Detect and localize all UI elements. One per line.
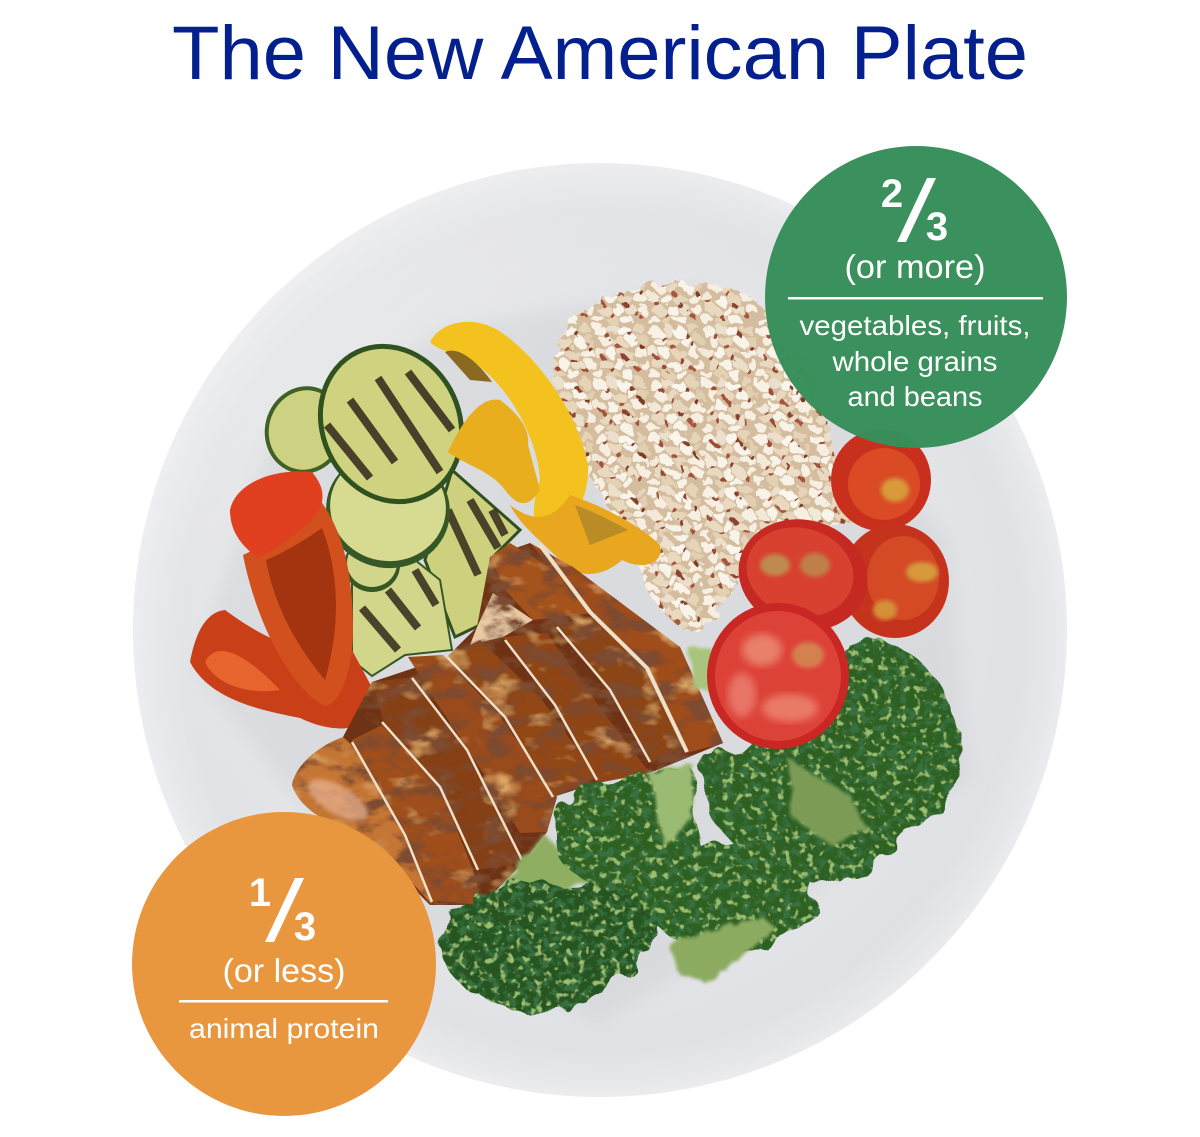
chicken: slice A (292, 737, 432, 905)
pepper: shading (205, 651, 280, 691)
grilled chicken (292, 543, 723, 905)
zucchini: left slice (255, 377, 355, 483)
quinoa (551, 279, 852, 632)
zucchini: small slice (344, 538, 400, 592)
fraction: 2/3 (881, 172, 948, 249)
label: animal protein: animal protein (189, 1013, 379, 1044)
pepper: chunk (448, 399, 540, 503)
label: food groups: vegetables, fruits, (800, 310, 1030, 341)
label: food groups: and beans (848, 381, 982, 412)
tomatoes (726, 429, 949, 645)
tomato: front (707, 603, 849, 749)
zucchini slices (255, 320, 520, 676)
fraction: 2/3: 3 (926, 205, 948, 249)
food shadow (195, 285, 970, 1025)
chicken: slice C (372, 677, 523, 870)
fraction: 1/3: 3 (294, 905, 316, 949)
title: The New American Plate (172, 11, 1028, 96)
yellow pepper (430, 322, 661, 574)
chicken: slice F (503, 633, 650, 783)
badge: two-thirds or more (765, 146, 1067, 448)
chicken: top slice (490, 543, 593, 620)
pepper: curved strip (430, 322, 588, 538)
zucchini: middle slice (317, 442, 459, 578)
label: or more: (or more) (844, 248, 986, 285)
chicken: right slice (530, 543, 723, 753)
tomato: middle (726, 505, 880, 645)
plate (133, 163, 1067, 1097)
broccoli (440, 641, 961, 1014)
fraction: 1/3 (249, 871, 316, 949)
zucchini: top slice (292, 320, 490, 528)
broccoli: front stems (650, 760, 868, 982)
pepper: top fold (230, 471, 323, 558)
label: food groups: whole grains (831, 346, 998, 377)
chicken: underlay (292, 543, 723, 905)
broccoli: florets (440, 641, 961, 1014)
chicken: slice G (557, 620, 683, 763)
chicken: slice B (352, 725, 482, 905)
chicken: back pale piece (470, 593, 533, 645)
badge: one-third or less (132, 812, 436, 1116)
pepper: inner (266, 528, 336, 680)
broccoli: back stems (500, 648, 712, 905)
tomato: top (831, 429, 931, 531)
label: or less: (or less) (222, 952, 346, 989)
zucchini: lower slice (352, 560, 452, 676)
pepper: inner shade (445, 351, 492, 382)
pepper: darker patch (575, 505, 628, 545)
chicken: slice D (408, 655, 557, 833)
chicken: white cut lines (352, 545, 687, 902)
pepper: main piece (243, 500, 353, 706)
pepper: lower piece (510, 495, 661, 574)
red pepper (190, 471, 385, 728)
fraction: 2/3: 2 (881, 172, 903, 216)
pepper: lower piece (190, 610, 385, 728)
fraction: 1/3: 1 (249, 871, 271, 915)
infographic canvas (132, 24, 1067, 1116)
chicken: highlight (302, 771, 374, 829)
label: food groups (800, 310, 1030, 412)
chicken: slice E (447, 640, 597, 797)
zucchini: strip right (425, 470, 520, 637)
tomato: right (841, 524, 949, 638)
